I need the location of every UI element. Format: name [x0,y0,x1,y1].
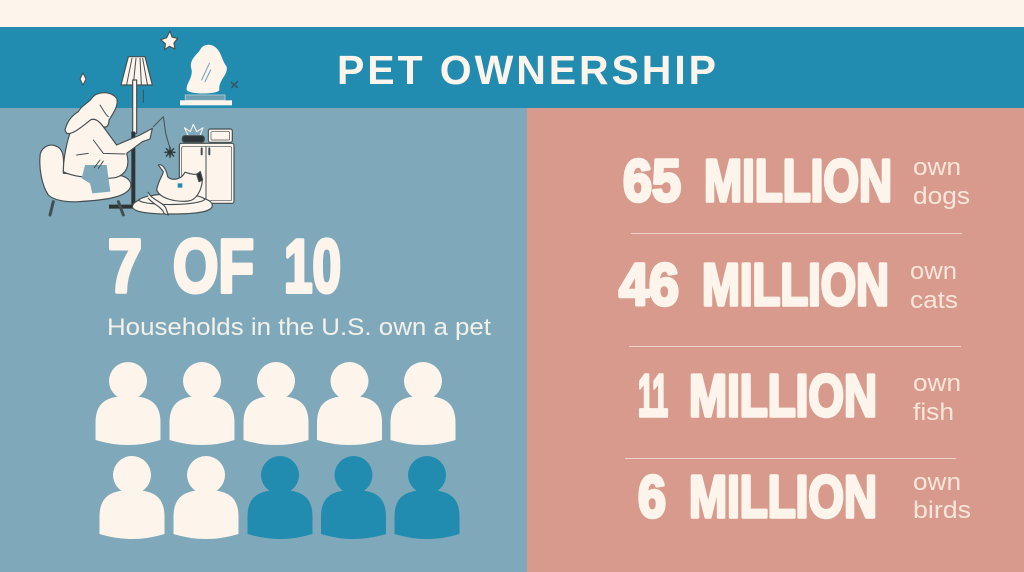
stat: dogs: MILLION [704,148,892,214]
stat: dogs: 65 [623,148,681,214]
statistic: 7 of 10: OF [173,224,254,308]
statistic: 7 of 10: 7 [108,224,142,308]
statistic: 7 of 10 [108,224,341,308]
stat: fish: MILLION [689,363,877,429]
stat: dogs [623,148,970,214]
stat: cats: 46 [619,252,679,318]
header band [0,27,1024,108]
panel: ownership by species [527,108,1024,572]
stat: birds: MILLION [689,464,877,530]
stat: fish: 11 [638,363,668,429]
stat: fish: own [913,370,961,397]
pictogram: 7 of 10 people [96,362,460,539]
top cream band [0,0,1024,27]
stat: birds: 6 [638,464,666,530]
title: PET OWNERSHIP [337,47,716,93]
panel: household ownership [0,108,527,572]
stat: cats: MILLION [702,252,889,318]
statistic: 7 of 10: 10 [284,224,341,308]
caption: households: Households in the U.S. own a pet [107,314,491,341]
stat: cats: cats [910,287,958,314]
stat: dogs: dogs [913,183,970,210]
illustration: woman playing with cat [40,31,237,215]
stat: birds: birds [913,497,971,524]
stat: cats: own [910,258,957,285]
stat: fish: fish [913,399,954,426]
stat: birds: own [913,469,961,496]
stat: dogs: own [913,154,961,181]
